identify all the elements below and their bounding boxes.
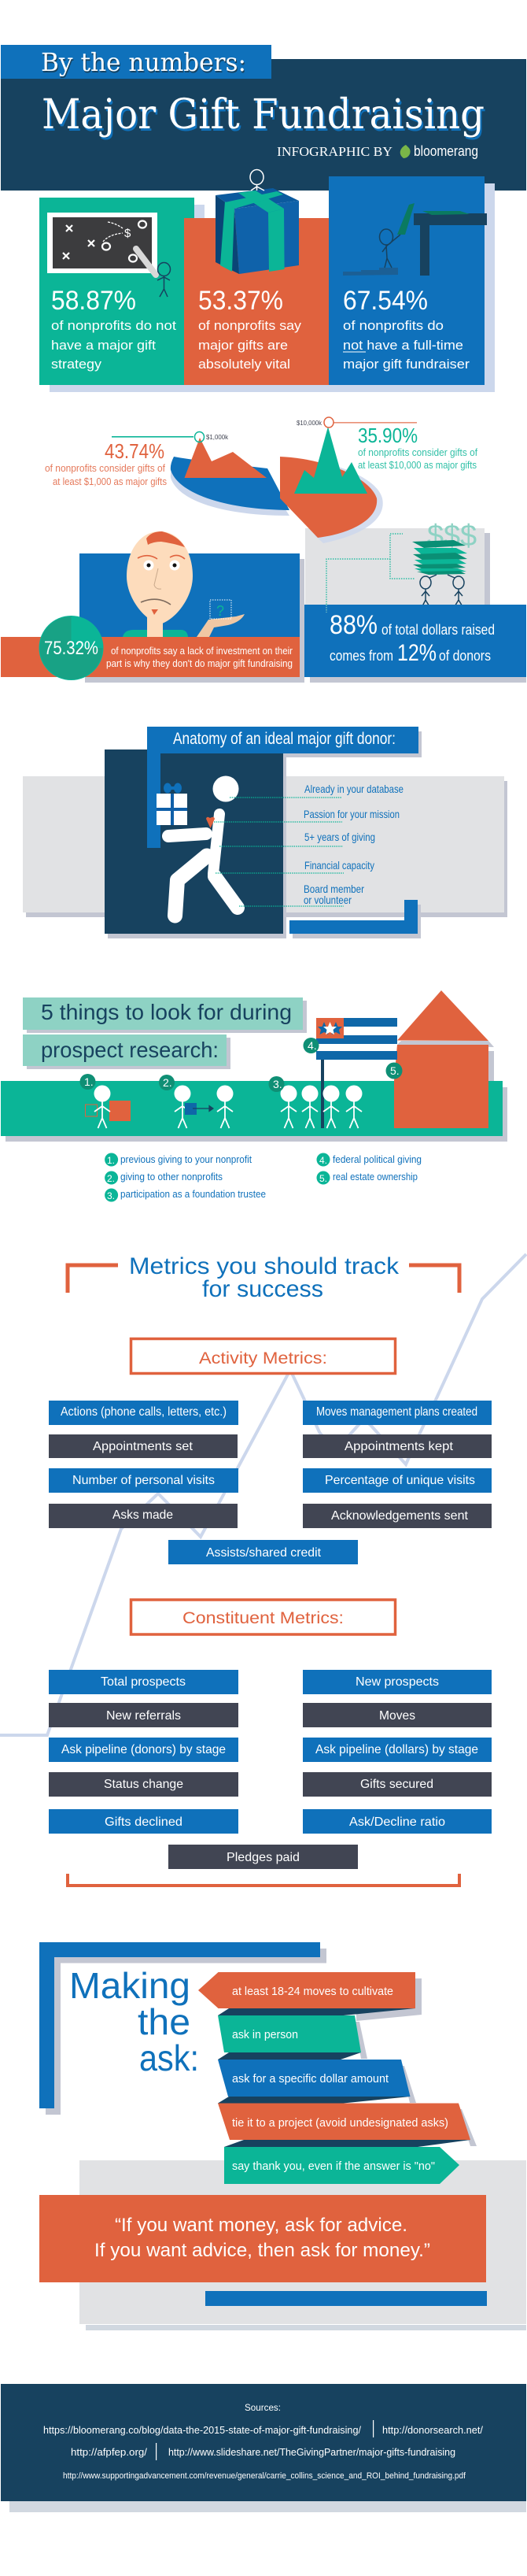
text block: have a major gift bbox=[51, 338, 156, 353]
activity metric boxes: Appointments kept bbox=[345, 1440, 454, 1453]
ribbon step 4 bbox=[218, 2104, 470, 2140]
panel: vital bbox=[184, 170, 329, 385]
heading: the bbox=[138, 2001, 190, 2042]
stat circle: 75.32%: 75.32% bbox=[44, 638, 98, 659]
icon: question mark box bbox=[210, 600, 231, 619]
panel: fundraiser bbox=[329, 176, 487, 385]
activity metric boxes bbox=[49, 1401, 492, 1564]
illustration: money stack bbox=[326, 520, 477, 608]
callout: 43.74%: 43.74% bbox=[105, 439, 164, 463]
text block: of nonprofits say bbox=[198, 318, 302, 333]
brand name: bloomerang bbox=[414, 143, 478, 159]
icon: bloomerang leaf bbox=[400, 145, 411, 158]
numbered badges: 3. bbox=[273, 1078, 282, 1090]
legend: real estate ownership bbox=[333, 1171, 418, 1183]
heading: constituent metrics bbox=[131, 1600, 395, 1634]
constituent metric boxes: New prospects bbox=[356, 1675, 439, 1689]
constituent metric boxes: Moves bbox=[379, 1709, 415, 1723]
donor attributes: 5+ years of giving bbox=[304, 831, 375, 843]
dollar signs: $ bbox=[427, 520, 444, 553]
ribbon step 1 bbox=[198, 1972, 415, 2008]
stat: 58.87%: 58.87% bbox=[51, 286, 136, 316]
section heading: metrics bbox=[68, 1253, 459, 1302]
icon: figures group 2 bbox=[175, 1085, 233, 1128]
section: prospect research bbox=[1, 990, 507, 1201]
icon: stick figure on steps bbox=[379, 229, 400, 268]
bottom bracket bbox=[68, 1874, 459, 1886]
constituent metric boxes: Pledges paid bbox=[227, 1851, 300, 1864]
legend: previous giving to your nonprofit bbox=[120, 1153, 252, 1165]
text block: strategy bbox=[51, 357, 102, 372]
icon: flag bbox=[316, 1018, 397, 1128]
ribbon folds bbox=[218, 2008, 470, 2147]
icon: chalkboard bbox=[47, 213, 157, 275]
legend: 3. bbox=[107, 1190, 115, 1201]
icon: chalkboard: $ bbox=[124, 227, 131, 240]
icon: figures group 1 bbox=[85, 1085, 131, 1128]
dollar signs: $ bbox=[460, 520, 477, 553]
ribbon step 5 bbox=[224, 2147, 459, 2184]
callout: 35.90%: 35.90% bbox=[358, 424, 418, 447]
stat circle: 75.32% bbox=[39, 616, 104, 680]
ribbon step 3: ask for a specific dollar amount bbox=[232, 2072, 389, 2086]
text block bbox=[198, 318, 302, 372]
legend: 5. bbox=[319, 1173, 327, 1184]
constituent metric boxes: Ask pipeline (donors) by stage bbox=[61, 1743, 226, 1756]
stick figures carrying bbox=[420, 575, 464, 608]
heading bar bbox=[147, 727, 418, 848]
icon: heart bbox=[206, 817, 215, 828]
panel: 88 percent: comes from bbox=[330, 648, 393, 664]
numbered badges: 1. bbox=[84, 1075, 94, 1088]
footer: sources bbox=[1, 2384, 526, 2512]
trend line behind metrics bbox=[0, 1254, 526, 1735]
icon: question mark box: ? bbox=[216, 603, 224, 619]
heading bbox=[69, 1965, 199, 2078]
panel: strategy bbox=[39, 198, 194, 385]
orange caption bar: part is why they don't do major gift fundraising bbox=[106, 657, 293, 669]
donor attributes: Already in your database bbox=[304, 783, 404, 795]
ribbon step 1: at least 18-24 moves to cultivate bbox=[232, 1985, 393, 1998]
footer: sources: Sources: bbox=[245, 2402, 281, 2413]
legend: participation as a foundation trustee bbox=[120, 1188, 266, 1200]
heading: Making bbox=[69, 1965, 190, 2006]
text block: of nonprofits do bbox=[343, 318, 444, 333]
icon: gift bbox=[157, 783, 187, 825]
constituent metric boxes: Gifts secured bbox=[360, 1778, 433, 1791]
corner frame bbox=[39, 1942, 326, 2115]
stat: 67.54%: 67.54% bbox=[343, 286, 428, 316]
heading: ask: bbox=[139, 2037, 199, 2078]
constituent metric boxes bbox=[49, 1670, 492, 1869]
callout: 35.90%: of nonprofits consider gifts of bbox=[358, 446, 477, 458]
footer: sources: http://www.slideshare.net/TheGivingPartner/major-gifts-fundraising bbox=[168, 2446, 455, 2458]
constituent metric boxes: Ask/Decline ratio bbox=[349, 1815, 445, 1829]
ribbon step 5: say thank you, even if the answer is "no" bbox=[232, 2160, 435, 2173]
kicker heading: By the numbers: bbox=[41, 47, 246, 77]
callout: 43.74%: of nonprofits consider gifts of bbox=[45, 462, 165, 474]
section heading: metrics: Metrics you should track bbox=[129, 1253, 400, 1279]
donor attributes: or volunteer bbox=[304, 894, 352, 906]
pie: 10000 dollar slice bbox=[280, 427, 383, 543]
activity metric boxes: Percentage of unique visits bbox=[325, 1474, 475, 1487]
constituent metric boxes: Gifts declined bbox=[105, 1815, 182, 1829]
quote panel bbox=[39, 2195, 486, 2282]
icon: figures group 3 bbox=[280, 1085, 362, 1128]
ribbon step 4: tie it to a project (avoid undesignated asks) bbox=[232, 2116, 448, 2130]
callout: 35.90%: at least $10,000 as major gifts bbox=[358, 459, 477, 471]
text block: not have a full-time bbox=[343, 338, 463, 353]
activity metric boxes: Acknowledgements sent bbox=[331, 1509, 469, 1523]
heading bbox=[23, 997, 307, 1069]
legend: 4. bbox=[319, 1155, 327, 1166]
quote panel: “If you want money, ask for advice. bbox=[115, 2215, 407, 2236]
icon: house bbox=[394, 990, 494, 1128]
icon: stick figure teacher bbox=[157, 263, 170, 297]
attribution: INFOGRAPHIC BY bbox=[277, 144, 392, 159]
activity metric boxes: Number of personal visits bbox=[72, 1474, 215, 1487]
panel: 88 percent background bbox=[305, 528, 490, 605]
stat: 53.37%: 53.37% bbox=[198, 286, 283, 316]
green ground band bbox=[1, 1081, 507, 1142]
donor attributes: Passion for your mission bbox=[304, 808, 400, 820]
marker: 10000 dollars bbox=[297, 417, 417, 427]
text block: of nonprofits do not bbox=[51, 318, 176, 333]
legend: federal political giving bbox=[333, 1153, 422, 1165]
chart: major gift threshold pies bbox=[45, 417, 477, 543]
marker: 10000 dollars: $10,000k bbox=[297, 420, 322, 427]
constituent metric boxes: Status change bbox=[104, 1778, 183, 1791]
ribbon step 2 bbox=[218, 2015, 361, 2052]
heading: activity metrics: Activity Metrics: bbox=[199, 1349, 327, 1368]
constituent metric boxes: Total prospects bbox=[101, 1675, 186, 1689]
text block: major gifts are bbox=[198, 338, 288, 353]
callout: 35.90% bbox=[358, 424, 477, 471]
ribbon step 2: ask in person bbox=[232, 2028, 298, 2041]
callout: 43.74%: at least $1,000 as major gifts bbox=[53, 476, 167, 487]
activity metric boxes: Actions (phone calls, letters, etc.) bbox=[61, 1405, 227, 1419]
cash pile bbox=[412, 540, 467, 575]
callout: 43.74% bbox=[45, 439, 167, 487]
heading: 5 things to look for during bbox=[41, 1000, 292, 1024]
heading: prospect research: bbox=[41, 1038, 219, 1062]
text block: major gift fundraiser bbox=[343, 357, 470, 372]
footer: sources: https://bloomerang.co/blog/data-the-2015-state-of-major-gift-fundraising/ bbox=[43, 2424, 361, 2436]
ribbon step 3 bbox=[218, 2060, 411, 2097]
orange caption bar: of nonprofits say a lack of investment on their bbox=[111, 645, 293, 657]
activity metric boxes: Assists/shared credit bbox=[206, 1546, 322, 1560]
panels: key statistics bbox=[39, 170, 495, 392]
grey quote backdrop bbox=[79, 2160, 526, 2330]
text block: absolutely vital bbox=[198, 357, 290, 372]
icon: empty desk bbox=[343, 203, 487, 276]
activity metric boxes: Appointments set bbox=[93, 1440, 193, 1453]
panel: 88 percent bbox=[304, 605, 526, 683]
ribbon shadows bbox=[355, 1978, 477, 2146]
panel: 88 percent: 88% bbox=[330, 610, 378, 640]
icon: gift box bbox=[216, 188, 299, 274]
header banner bbox=[1, 45, 526, 191]
text block bbox=[51, 318, 176, 372]
donor attributes bbox=[304, 783, 404, 906]
main title: Major Gift Fundraising bbox=[42, 91, 485, 139]
numbered badges bbox=[80, 1038, 403, 1092]
blue accent bar bbox=[205, 2291, 487, 2306]
legend bbox=[105, 1153, 422, 1201]
constituent metric boxes: New referrals bbox=[106, 1709, 181, 1723]
constituent metric boxes: Ask pipeline (dollars) by stage bbox=[315, 1743, 478, 1756]
panel: anatomy of donor bbox=[23, 727, 507, 938]
corner accent bbox=[289, 900, 421, 938]
quote panel: If you want advice, then ask for money.” bbox=[94, 2240, 430, 2261]
marker: 1000 dollars bbox=[112, 431, 229, 442]
footer: sources: http://afpfep.org/ bbox=[71, 2446, 147, 2458]
text block bbox=[343, 318, 470, 372]
heading: activity metrics bbox=[131, 1338, 395, 1373]
heading: constituent metrics: Constituent Metrics: bbox=[182, 1609, 344, 1627]
dollar signs: $ bbox=[444, 520, 460, 553]
legend: 1. bbox=[107, 1155, 115, 1166]
dollar signs bbox=[427, 520, 477, 553]
icon: stick figure on gift bbox=[250, 170, 264, 191]
dotted connector bbox=[326, 534, 415, 605]
section heading: metrics: for success bbox=[202, 1276, 323, 1302]
panel: 88 percent: of total dollars raised bbox=[381, 622, 495, 638]
donor attributes: Board member bbox=[304, 883, 364, 895]
illustration: donor figure bbox=[157, 776, 239, 916]
legend: giving to other nonprofits bbox=[120, 1171, 223, 1183]
section: making the ask bbox=[39, 1942, 526, 2330]
illustration: worried man bbox=[123, 531, 245, 637]
activity metric boxes: Moves management plans created bbox=[316, 1405, 477, 1419]
dotted callout lines bbox=[214, 798, 344, 906]
numbered badges: 2. bbox=[163, 1076, 172, 1089]
donor attributes: Financial capacity bbox=[304, 859, 374, 872]
pie: 1000 dollar slice bbox=[171, 438, 289, 516]
numbered badges: 4. bbox=[308, 1039, 317, 1052]
orange caption bar bbox=[1, 637, 300, 677]
legend: 2. bbox=[107, 1173, 115, 1184]
panel: lack of investment bbox=[1, 531, 304, 683]
footer: sources: http://www.supportingadvancement.com/revenue/general/carrie_collins_science_and_ROI_behind_fundraising.pdf bbox=[63, 2471, 466, 2481]
panel: 88 percent: of donors bbox=[439, 648, 491, 664]
numbered badges: 5. bbox=[390, 1064, 400, 1077]
heading bar: Anatomy of an ideal major gift donor: bbox=[173, 730, 396, 748]
footer: sources: http://donorsearch.net/ bbox=[382, 2424, 483, 2436]
activity metric boxes: Asks made bbox=[112, 1508, 173, 1522]
panel: 88 percent: 12% bbox=[397, 640, 437, 666]
marker: 1000 dollars: $1,000k bbox=[206, 434, 229, 441]
